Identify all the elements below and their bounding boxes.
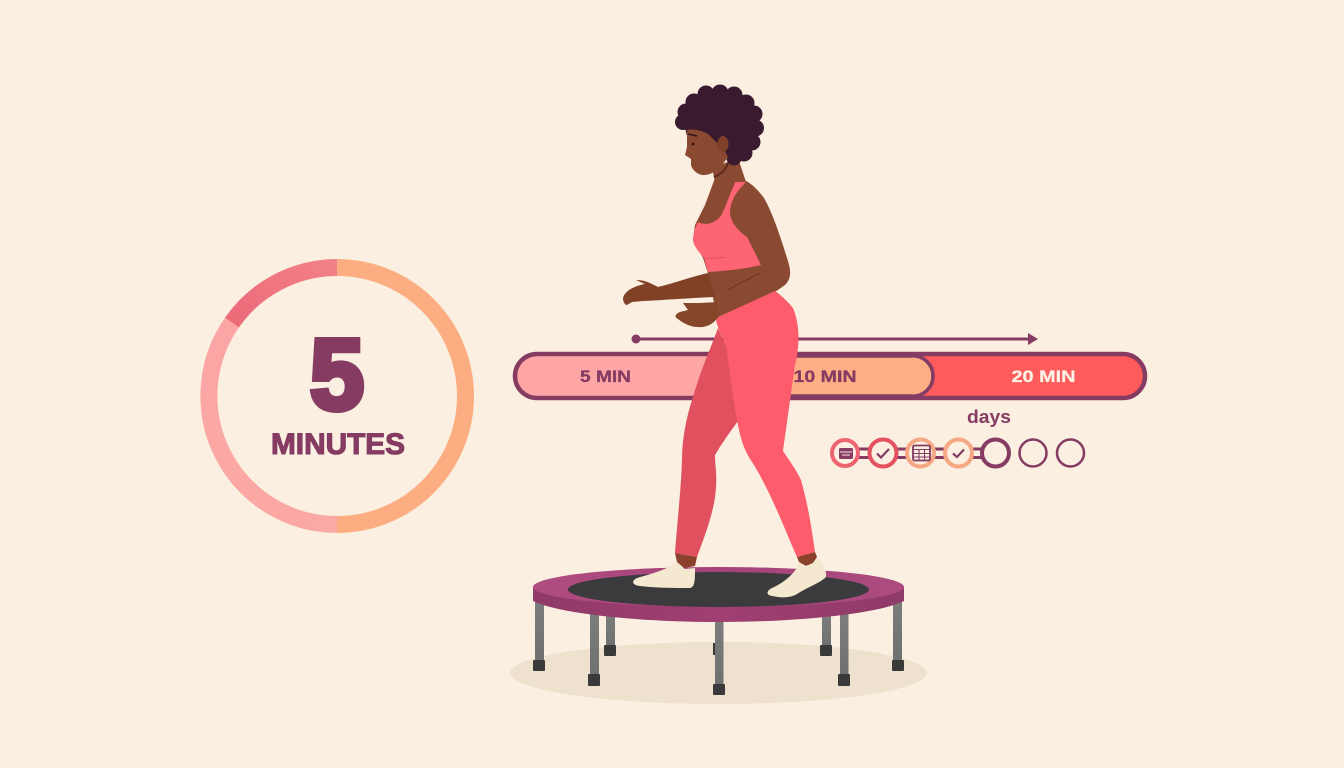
eyebrow (688, 134, 697, 136)
mat (568, 572, 869, 607)
head and face (685, 129, 728, 175)
day 4: check (945, 440, 972, 466)
ring arc: orange segment (337, 268, 466, 524)
day 3: calendar (907, 440, 934, 466)
rim side (533, 587, 904, 622)
label: 5 min: 5 MIN (580, 367, 631, 386)
eye (692, 143, 694, 145)
back leg (675, 328, 738, 557)
segment: 5 min (517, 356, 720, 396)
day 1: calendar (832, 440, 858, 466)
sports bra (693, 179, 761, 272)
rear hand (676, 302, 719, 327)
hair (675, 84, 764, 166)
back ankle (675, 553, 697, 568)
label: minutes: MINUTES (271, 428, 405, 461)
label: 10 min: 10 MIN (794, 367, 856, 386)
back legs (604, 612, 832, 656)
front forearm and hand (623, 273, 715, 305)
trampoline shadow (510, 642, 927, 704)
front ankle (797, 552, 817, 566)
front leg (716, 291, 815, 557)
front shoe (768, 558, 826, 597)
segment: 10 min (600, 356, 933, 396)
day 5: current (982, 440, 1009, 466)
day 7: empty (1057, 440, 1084, 466)
progress bar: 5, 10, 20 min (515, 354, 1145, 398)
day 2: check (870, 440, 896, 466)
ear (718, 136, 728, 152)
midriff crease (728, 273, 760, 290)
segment: 20 min (515, 354, 1145, 398)
trampoline (533, 567, 904, 695)
label: days: days (967, 407, 1011, 427)
days tracker (832, 407, 1084, 466)
bra band line (704, 257, 726, 258)
number 5: 5 (310, 319, 364, 431)
front legs (533, 596, 904, 695)
label: 20 min: 20 MIN (1012, 367, 1076, 386)
ring arc: red segment (232, 268, 337, 322)
connectors (855, 449, 985, 458)
torso and rear arm (693, 178, 790, 318)
ring: 5 minutes timer (209, 268, 466, 524)
ring arc: pink segment (209, 322, 337, 524)
neck (712, 158, 746, 182)
rim top (533, 567, 904, 607)
bar outline (515, 354, 1145, 398)
figure: woman on trampoline (623, 84, 826, 597)
progress arrow (632, 333, 1038, 345)
day 6: empty (1020, 440, 1046, 466)
back shoe (633, 562, 695, 588)
neck shadow (714, 163, 728, 177)
